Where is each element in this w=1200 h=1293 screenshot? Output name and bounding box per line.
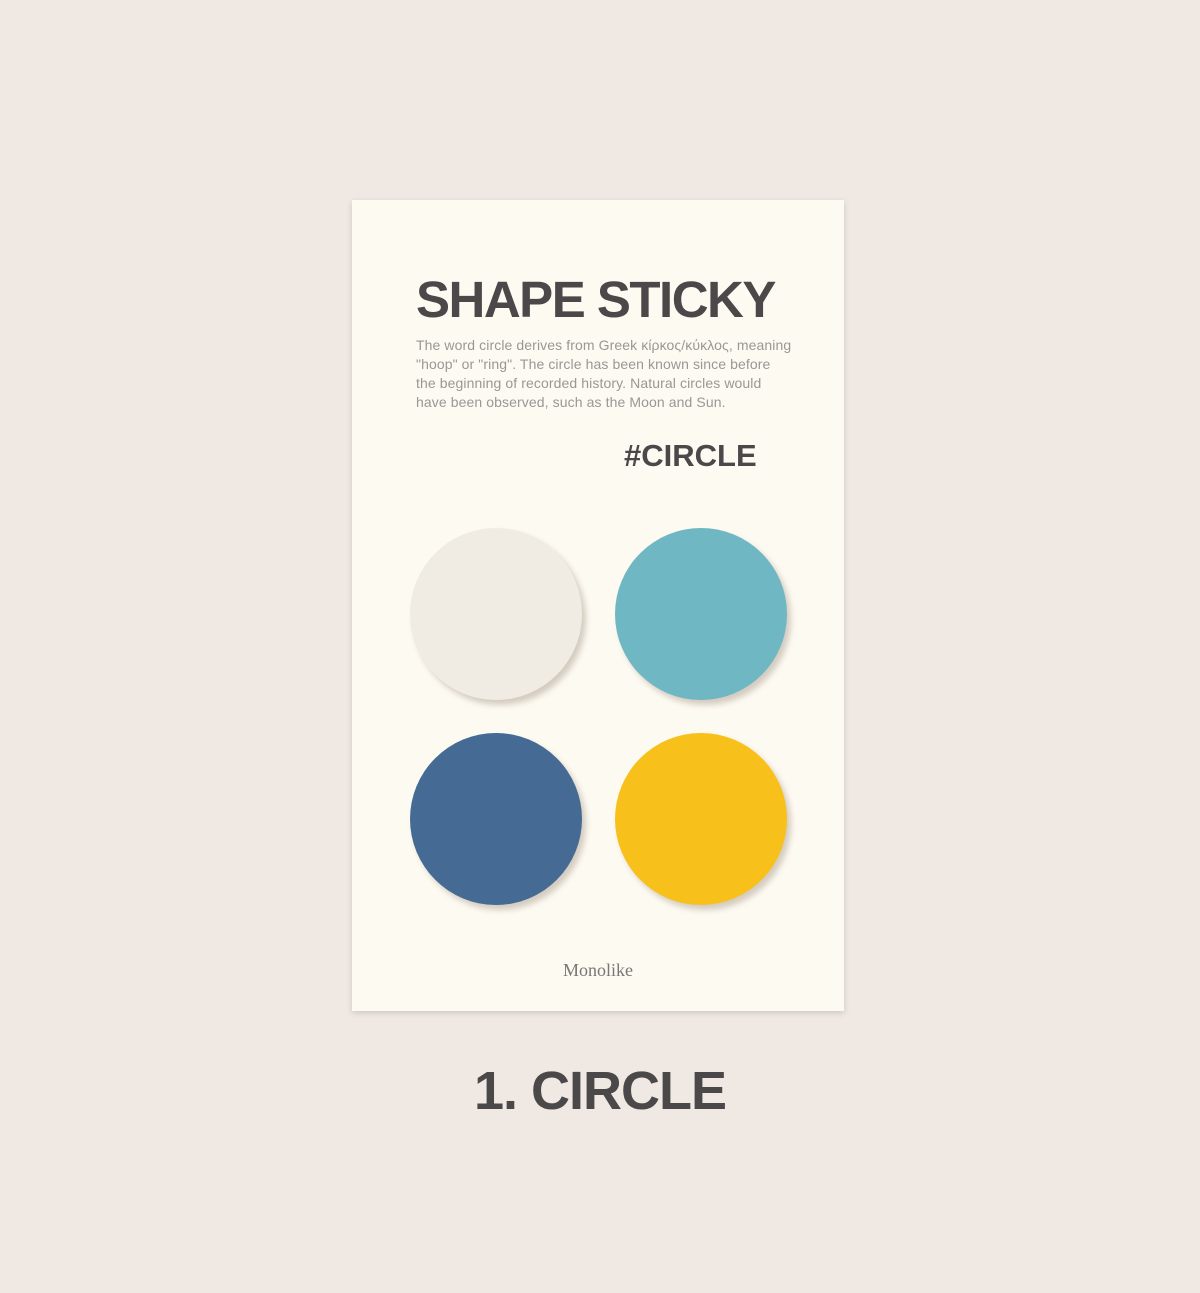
description text: The word circle derives from Greek κίρκος/κύκλος, meaning xyxy=(416,337,791,353)
panel: sticky card xyxy=(352,200,844,1011)
caption: 1. CIRCLE xyxy=(474,1061,726,1121)
description text xyxy=(416,337,791,410)
hashtag: #CIRCLE xyxy=(624,438,757,473)
description text: "hoop" or "ring". The circle has been known since before xyxy=(416,356,770,372)
circle: cream xyxy=(410,528,582,700)
circle: yellow xyxy=(615,733,787,905)
circle: blue xyxy=(410,733,582,905)
description text: have been observed, such as the Moon and Sun. xyxy=(416,394,726,410)
title: SHAPE STICKY xyxy=(416,271,775,328)
circle: teal xyxy=(615,528,787,700)
brand: Monolike xyxy=(563,960,633,980)
description text: the beginning of recorded history. Natural circles would xyxy=(416,375,761,391)
